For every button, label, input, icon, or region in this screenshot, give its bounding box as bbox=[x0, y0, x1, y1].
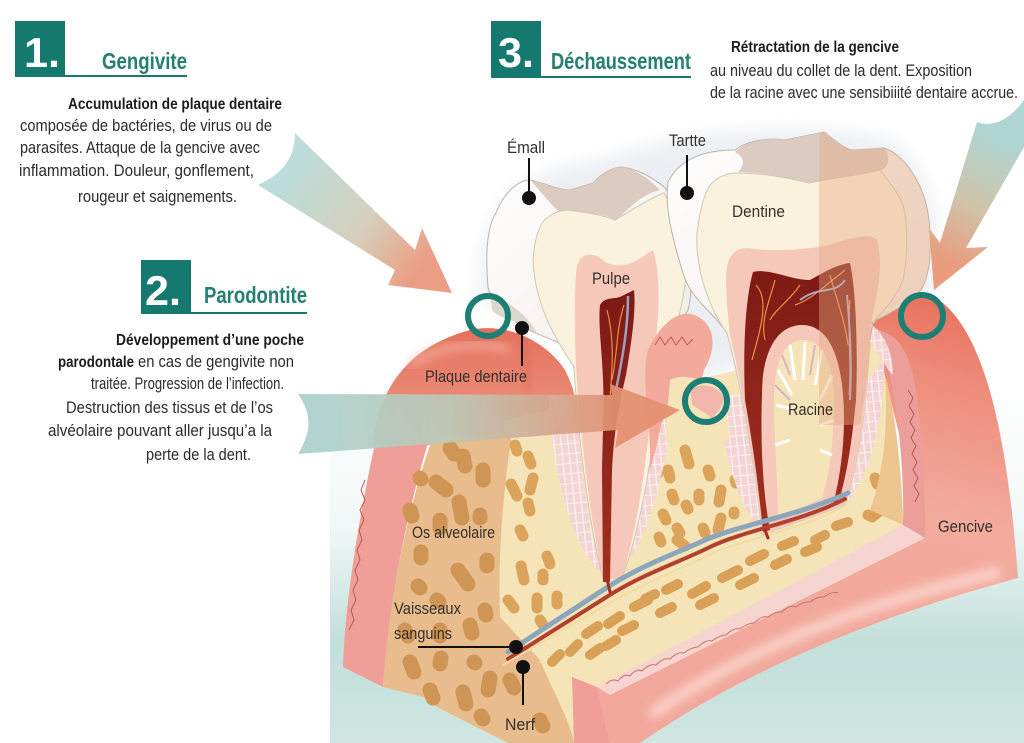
section 3 heading: Déchaussement bbox=[551, 48, 691, 74]
section 3 heading: 3. bbox=[498, 29, 534, 76]
illustration: tooth cross-section bbox=[343, 125, 1018, 743]
label: nerf bbox=[505, 660, 535, 734]
vessels and nerve bundle bbox=[503, 493, 848, 665]
right gum bbox=[597, 294, 1018, 743]
label: plaque dentaire bbox=[425, 321, 529, 386]
holes: middle bone bbox=[508, 425, 885, 625]
left red gum top bbox=[372, 328, 578, 445]
section 2 heading bbox=[141, 260, 307, 314]
tooth 1 enamel bbox=[487, 167, 691, 373]
section 2 text: parodontale bbox=[58, 354, 134, 371]
label: plaque dentaire: Plaque dentaire bbox=[425, 367, 527, 386]
label: email: Émall bbox=[507, 138, 545, 157]
label: tartre bbox=[669, 131, 706, 200]
label: nerf: Nerf bbox=[505, 715, 535, 734]
arrow 3 bbox=[929, 100, 1024, 290]
tooth 2 enamel bbox=[667, 132, 930, 340]
section 3 text: Rétractation de la gencive bbox=[731, 39, 899, 56]
label: gencive: Gencive bbox=[938, 517, 993, 536]
label: vaisseaux sanguins bbox=[394, 599, 523, 654]
section 3 heading bbox=[491, 21, 691, 78]
marker circle: pocket bbox=[685, 380, 727, 422]
section 2 text: en cas de gengivite non bbox=[138, 352, 294, 371]
left gum cut face bbox=[343, 430, 432, 687]
tooth 2 dentin and root bbox=[697, 170, 907, 535]
background panel bbox=[330, 380, 1024, 743]
bone crest under gum bump bbox=[665, 377, 730, 440]
label: vaisseaux sanguins: Vaisseaux bbox=[394, 599, 461, 618]
marker circle: gum line right bbox=[901, 295, 943, 337]
tooth 1 pulp chamber bbox=[575, 250, 659, 578]
tooth 1 dentin and root bbox=[533, 193, 686, 578]
label: dentine: Dentine bbox=[732, 202, 785, 221]
label: racine: Racine bbox=[788, 400, 833, 419]
arrow 1 bbox=[258, 133, 452, 293]
section 1 text: inflammation. Douleur, gonflement, bbox=[19, 161, 254, 180]
tooth 2 canal arch bbox=[744, 263, 857, 532]
section 2 text bbox=[48, 332, 304, 464]
soft shadow around teeth bbox=[480, 130, 937, 380]
section 2 heading: Parodontite bbox=[204, 282, 307, 308]
tooth 1 occlusal shading bbox=[530, 167, 660, 220]
cream bone bbox=[496, 340, 905, 743]
floor strip and front band bbox=[539, 503, 903, 687]
section 2 text: Développement d’une poche bbox=[116, 332, 304, 349]
arrow 2 bbox=[298, 384, 680, 454]
tooth 1 bbox=[487, 167, 691, 582]
section 3 text bbox=[710, 39, 1018, 102]
section 1 heading: Gengivite bbox=[102, 48, 187, 74]
tooth 2 pulp region bbox=[726, 236, 880, 535]
section 2 text: Destruction des tissus et de l’os bbox=[66, 398, 273, 417]
section 1 text: Accumulation de plaque dentaire bbox=[68, 96, 282, 113]
label: os alveolaire: Os alveolaire bbox=[412, 523, 495, 542]
section 1 heading: 1. bbox=[24, 29, 60, 76]
section 2 text: alvéolaire pouvant aller jusqu’a la bbox=[48, 421, 272, 440]
tooth 1 canal bbox=[599, 290, 635, 582]
tinted half overlay bbox=[819, 125, 934, 425]
section 2 heading: 2. bbox=[145, 267, 181, 314]
section 1 text: composée de bactéries, de virus ou de bbox=[20, 116, 272, 135]
label: pulpe: Pulpe bbox=[592, 269, 630, 288]
holes: left bone bbox=[405, 448, 543, 726]
section 3 text: au niveau du collet de la dent. Exposition bbox=[710, 61, 972, 80]
plaque at gum line bbox=[490, 292, 538, 335]
holes: floor bbox=[552, 510, 882, 662]
marker circle: gum line left bbox=[468, 296, 508, 336]
root interior bone bbox=[774, 340, 834, 518]
section 1 text: parasites. Attaque de la gencive avec bbox=[20, 138, 260, 157]
section 2 text: traitée. Progression de l’infection. bbox=[91, 374, 284, 393]
label: vaisseaux sanguins: sanguins bbox=[394, 624, 452, 643]
tooth 2 occlusal shading bbox=[735, 132, 888, 183]
section 1 text bbox=[19, 96, 282, 206]
periodontal ligament, tooth 2 bbox=[718, 360, 884, 535]
label: email bbox=[507, 138, 545, 205]
label: tartre: Tartte bbox=[669, 131, 706, 150]
section 1 heading bbox=[15, 21, 187, 77]
tooth 2 bbox=[667, 125, 934, 535]
section 1 text: rougeur et saignements. bbox=[78, 187, 237, 206]
right cut face layers bbox=[878, 330, 925, 538]
left bone face bbox=[383, 432, 574, 743]
section 2 text: perte de la dent. bbox=[146, 445, 251, 464]
gum bump between teeth bbox=[645, 314, 713, 470]
pocket inside circle bbox=[690, 385, 724, 420]
periodontal ligament, tooth 1 bbox=[548, 385, 674, 578]
